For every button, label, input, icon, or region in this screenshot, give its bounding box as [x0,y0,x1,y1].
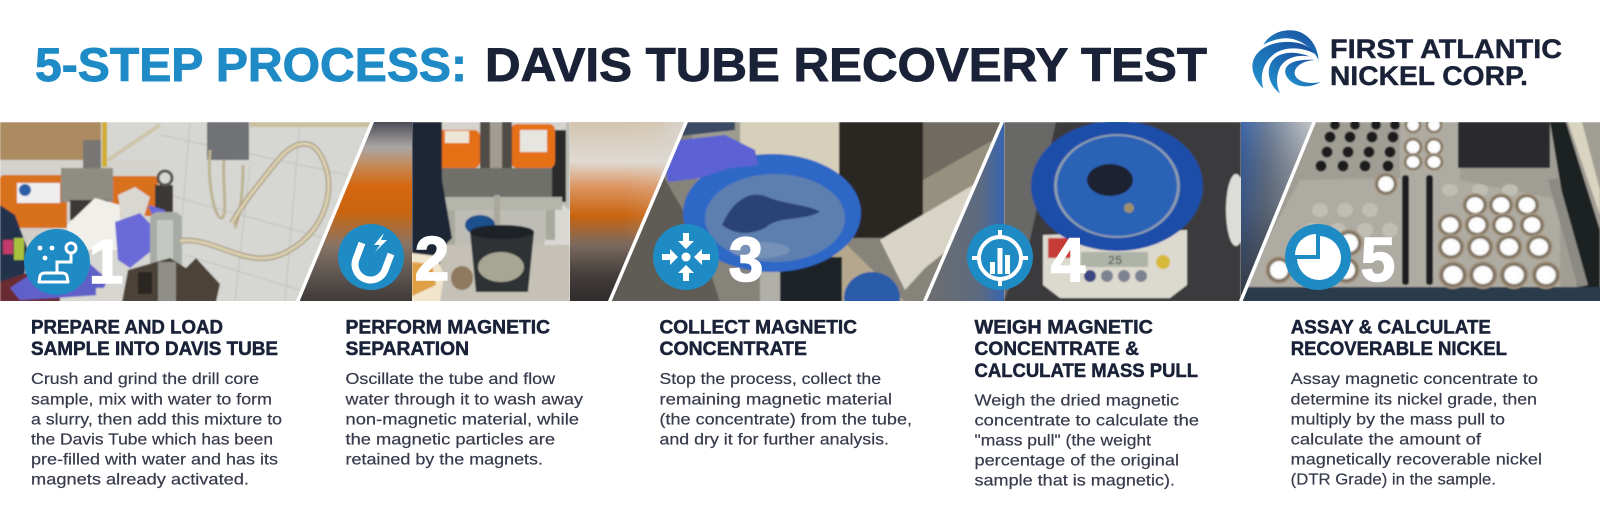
heading: step 1 [31,316,278,360]
body: step 5: calculate the amount of [1291,431,1482,448]
body: step 5: determine its nickel grade, then [1291,391,1537,408]
icon: step 1 sample loading [24,229,90,295]
heading: step 3 [660,316,857,360]
title: DAVIS TUBE RECOVERY TEST [485,38,1207,91]
step 1 text [31,316,282,488]
heading: step 1: PREPARE AND LOAD [31,316,223,338]
body: step 4: sample that is magnetic). [974,473,1175,490]
step number 2: 2 [415,225,449,294]
body: step 3: Stop the process, collect the [660,371,881,388]
body: step 5: (DTR Grade) in the sample. [1291,471,1496,488]
title [35,38,1207,91]
blurred band between photos 3 and 4 [926,122,1004,301]
body: step 4: concentrate to calculate the [974,413,1199,430]
photo strip [0,122,1600,301]
heading: step 3: CONCENTRATE [660,338,807,360]
photo 1: loading sample into Davis tube [0,122,375,302]
body: step 3: and dry it for further analysis. [660,431,889,448]
body: step 1: a slurry, then add this mixture to [31,411,282,428]
heading: step 1: SAMPLE INTO DAVIS TUBE [31,338,278,360]
body: step 5: magnetically recoverable nickel [1291,451,1542,468]
icon: step 5 pie chart [1285,224,1351,290]
body: step 2: Oscillate the tube and flow [346,371,555,388]
step 4 text [974,316,1199,490]
heading: step 4 [974,316,1198,382]
heading: step 2: SEPARATION [346,338,469,360]
body: step 2 [344,371,583,468]
icon: step 4 target with bars [967,224,1033,290]
title: 5-STEP PROCESS: [35,38,467,91]
body: step 4: Weigh the dried magnetic [974,393,1179,410]
body: step 1: sample, mix with water to form [31,391,272,408]
heading: step 5: ASSAY & CALCULATE [1291,316,1491,338]
logo: First Atlantic Nickel Corp.: FIRST ATLANTIC [1330,34,1562,64]
heading: step 2 [346,316,550,360]
logo: First Atlantic Nickel Corp.: NICKEL CORP. [1330,61,1528,91]
heading: step 3: COLLECT MAGNETIC [660,316,857,338]
body: step 2: non-magnetic material, while [346,411,579,428]
heading: step 2: PERFORM MAGNETIC [346,316,550,338]
heading: step 4: CONCENTRATE & [974,338,1139,360]
photo 5: assay tray with sample cups [1235,116,1600,302]
step number 5: 5 [1361,226,1395,295]
body: step 4: "mass pull" (the weight [974,433,1152,450]
body: step 4: percentage of the original [974,453,1179,470]
step 3 text [660,316,912,448]
body: step 1 [31,371,282,488]
icon: wave swoosh [1252,30,1321,93]
logo: First Atlantic Nickel Corp. [1252,30,1562,93]
body: step 4 [974,393,1199,490]
blurred band between photos 2 and 3 [565,122,690,302]
photo 3: collecting concentrate in blue pan [612,122,1000,301]
body: step 3: remaining magnetic material [660,391,892,408]
heading: step 4: CALCULATE MASS PULL [974,360,1198,382]
body: step 5 [1291,371,1542,488]
body: step 3 [660,371,912,448]
body: step 1: magnets already activated. [31,471,249,488]
blurred band between photos 1 and 2 [300,122,412,301]
step number 4: 4 [1051,226,1086,295]
heading: step 4: WEIGH MAGNETIC [974,316,1153,338]
photo 4: weighing concentrate on a scale: 25 [1108,254,1122,268]
step 5 text [1291,316,1542,488]
blurred band between photos 4 and 5 [1241,122,1312,296]
body: step 1: the Davis Tube which has been [31,431,273,448]
icon: step 2 magnet [338,224,404,290]
photo 2: magnetic separation [412,122,570,305]
body: step 1: pre-filled with water and has its [31,451,278,468]
step number 1: 1 [89,228,123,297]
body: step 5: Assay magnetic concentrate to [1291,371,1538,388]
body: step 3: (the concentrate) from the tube, [660,411,912,428]
body: step 5: multiply by the mass pull to [1291,411,1505,428]
heading: step 5: RECOVERABLE NICKEL [1291,338,1507,360]
heading: step 5 [1291,316,1507,360]
photo 4: weighing concentrate on a scale [1004,121,1246,302]
step 2 text [344,316,583,468]
body: step 1: Crush and grind the drill core [31,371,259,388]
body: step 2: the magnetic particles are [346,431,555,448]
step number 3: 3 [729,226,763,295]
body: step 2: water through it to wash away [344,391,583,408]
icon: step 3 converging arrows [653,224,719,290]
body: step 2: retained by the magnets. [346,451,543,468]
